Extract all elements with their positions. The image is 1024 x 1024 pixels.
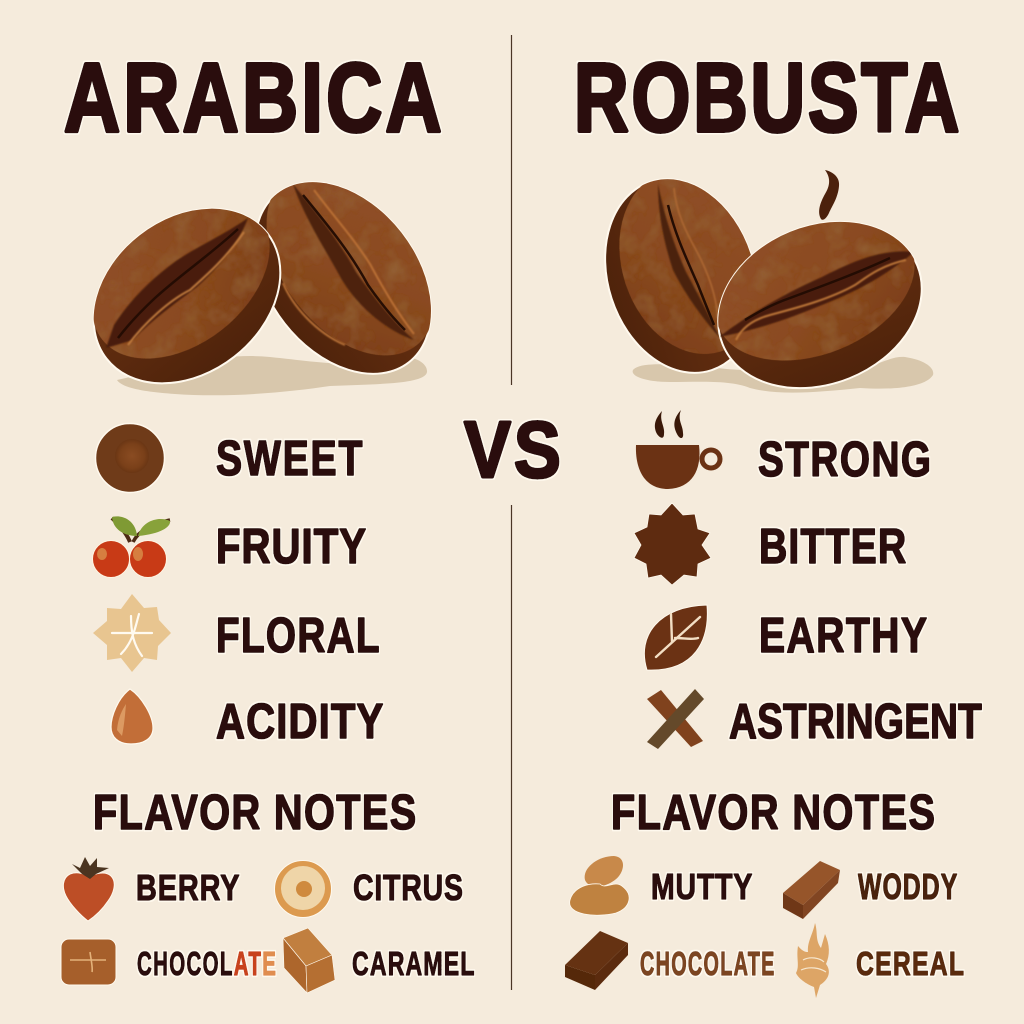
label: floral: FLORAL	[216, 609, 380, 663]
icon: astringent crossed sticks	[647, 689, 704, 749]
label: woody: WODDY	[858, 866, 957, 907]
title: Robusta: ROBUSTA	[574, 44, 959, 152]
icon: cereal	[796, 923, 829, 998]
illustration: robusta coffee beans	[604, 178, 934, 393]
icon: chocolate block	[565, 931, 628, 990]
label: cereal: CEREAL	[856, 947, 964, 983]
label: berry: BERRY	[136, 867, 240, 908]
icon: strong coffee cup	[636, 410, 720, 489]
icon: steam wisp	[819, 170, 839, 220]
label: bitter: BITTER	[759, 520, 906, 574]
icon: nutty	[570, 856, 629, 915]
icon: chocolate square	[61, 939, 116, 985]
label: caramel: CARAMEL	[352, 946, 474, 983]
label: acidity: ACIDITY	[216, 694, 383, 749]
icon: berry	[63, 857, 114, 921]
label: astringent: ASTRINGENT	[729, 695, 982, 749]
label: chocolate: CHOCOLATE	[640, 945, 774, 982]
icon: earthy leaf	[644, 605, 707, 670]
label: fruity: FRUITY	[216, 519, 366, 574]
icon: caramel cube	[283, 928, 335, 993]
icon: floral	[93, 594, 171, 672]
label: chocolate: CHOCOLATE	[137, 945, 276, 982]
icon: sweet	[96, 424, 164, 492]
label: mutty: MUTTY	[651, 866, 753, 907]
title: Arabica: ARABICA	[64, 43, 442, 152]
label: strong: STRONG	[758, 433, 931, 487]
illustration: arabica coffee beans	[92, 181, 432, 396]
icon: fruity cherries	[92, 516, 170, 578]
heading: flavor notes arabica: FLAVOR NOTES	[93, 786, 416, 840]
label: sweet: SWEET	[216, 432, 362, 486]
icon: citrus	[274, 860, 332, 918]
icon: woody block	[783, 861, 840, 919]
heading: flavor notes robusta: FLAVOR NOTES	[611, 786, 935, 840]
heading: VS: VS	[464, 405, 561, 494]
label: earthy: EARTHY	[759, 609, 927, 663]
icon: bitter burst	[634, 503, 711, 585]
icon: acidity drop	[111, 689, 153, 744]
label: citrus: CITRUS	[353, 867, 463, 908]
